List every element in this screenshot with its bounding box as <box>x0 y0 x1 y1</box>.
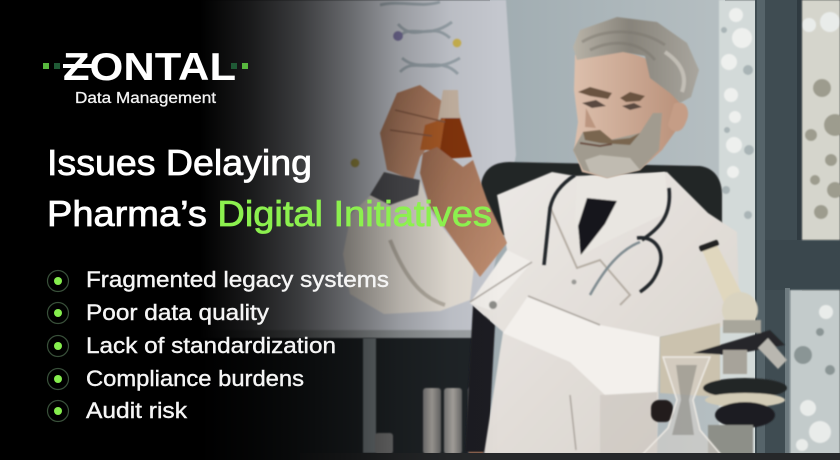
desk edge <box>300 453 840 460</box>
window frame <box>755 0 802 460</box>
lab coat <box>343 172 739 454</box>
microscope <box>651 239 787 455</box>
shirt collar and tie <box>575 172 668 255</box>
lattice window panel <box>719 0 757 460</box>
logo wordmark: ZONTAL <box>63 46 236 89</box>
list item: audit risk: Audit risk <box>86 398 188 423</box>
logo left squares <box>43 63 60 69</box>
window panes <box>790 0 840 460</box>
beard <box>573 113 662 178</box>
glass flask on the desk <box>640 357 723 457</box>
list item: poor data quality: Poor data quality <box>86 300 269 325</box>
list item: fragmented legacy systems: Fragmented legacy systems <box>86 267 389 292</box>
list item: audit risk <box>48 398 188 423</box>
logo crossbar through Z <box>63 64 93 68</box>
hair <box>573 17 699 103</box>
title <box>47 142 492 234</box>
list item: lack of standardization: Lack of standardization <box>86 333 336 358</box>
stethoscope <box>544 175 669 295</box>
logo right squares <box>231 63 248 69</box>
logo: Zontal Data Management <box>43 46 248 107</box>
title line 2: Pharma’s Digital Initiatives <box>47 193 492 234</box>
logo subtitle: Data Management <box>75 90 217 107</box>
whiteboard <box>190 0 516 338</box>
hands and flask <box>370 85 507 277</box>
office chair <box>465 162 722 452</box>
list item: compliance burdens: Compliance burdens <box>86 366 304 391</box>
title line 1: Issues Delaying <box>47 142 312 183</box>
wall <box>490 0 725 460</box>
head and face <box>574 45 688 178</box>
shelf and test tubes <box>363 338 484 455</box>
list of issues <box>48 267 389 423</box>
